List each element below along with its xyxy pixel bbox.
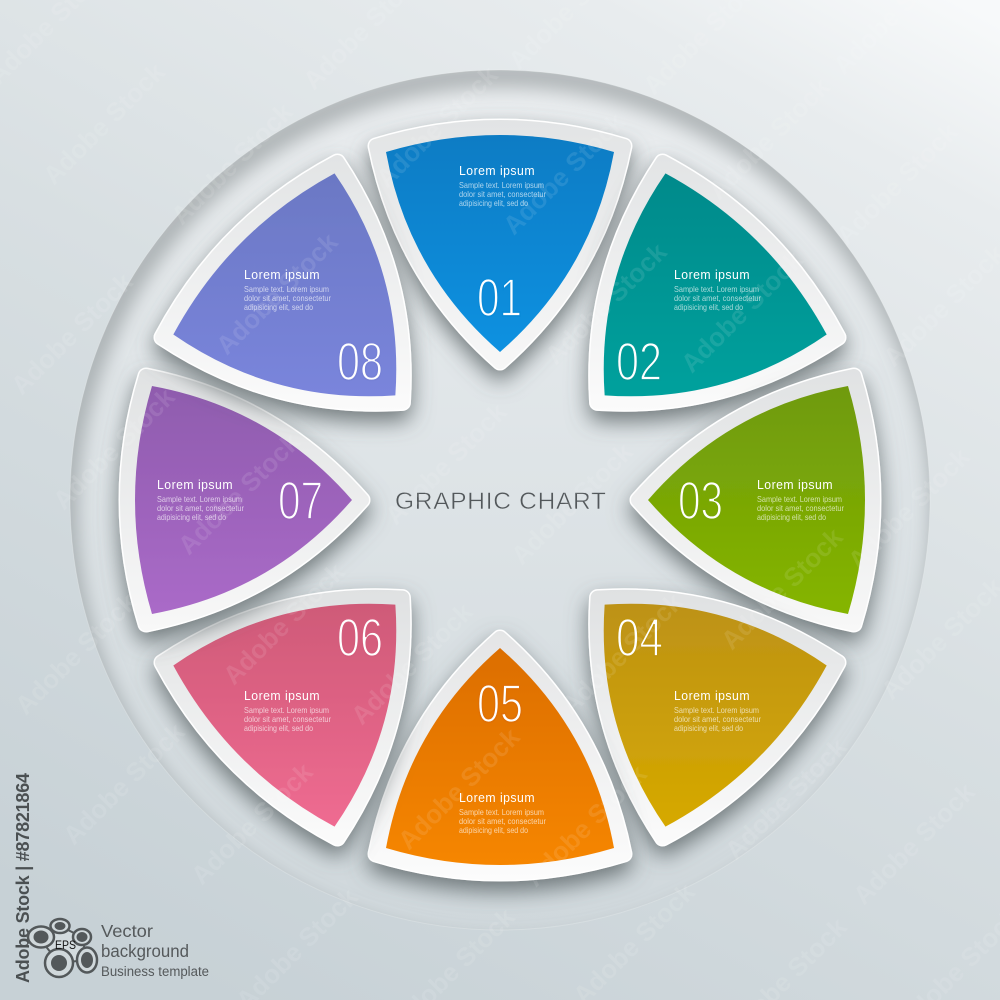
heading 04: Lorem ipsum [674,688,750,703]
body text 02: adipisicing elit, sed do [674,302,743,312]
body text 07: dolor sit amet, consectetur [157,503,244,513]
segment 05 [376,638,624,873]
watermarks: Adobe Stock [217,556,351,690]
heading 05: Lorem ipsum [459,790,535,805]
watermarks: Adobe Stock [47,381,181,515]
body text 03: Sample text. Lorem ipsum [757,494,842,504]
body text 06: Sample text. Lorem ipsum [244,705,329,715]
watermarks: Adobe Stock [370,59,504,193]
body text 07: adipisicing elit, sed do [157,512,226,522]
icon: EPS badge: EPS [55,938,76,952]
number 08: 08 [337,332,383,392]
body text 08: dolor sit amet, consectetur [244,293,331,303]
body text 02: Sample text. Lorem ipsum [674,284,759,294]
icon: EPS badge [28,919,97,977]
watermarks: Adobe Stock [210,226,344,360]
card 06 [149,510,490,851]
number 05: 05 [477,674,523,734]
watermarks: Adobe Stock [719,731,853,865]
heading 08: Lorem ipsum [244,267,320,282]
body text 01: adipisicing elit, sed do [459,198,528,208]
segment 06 [149,510,490,851]
segment 04 [510,510,851,851]
watermarks: Adobe Stock [702,71,836,205]
segment 03 [638,376,873,624]
watermarks: Adobe Stock [715,521,849,655]
watermarks: Adobe Stock [505,436,639,570]
body text 06: dolor sit amet, consectetur [244,714,331,724]
watermarks: Adobe Stock [675,244,809,378]
heading 03: Lorem ipsum [757,477,833,492]
watermarks: Adobe Stock [847,776,981,910]
watermarks: Adobe Stock [842,441,976,575]
card 02 [510,149,851,490]
segment 01 [376,127,624,362]
watermarks: Adobe Stock [519,758,653,892]
watermarks: Adobe Stock [392,721,526,855]
watermarks: Adobe Stock [379,396,513,530]
segment 08 [149,149,490,490]
watermarks: Adobe Stock [5,266,139,400]
body text 01 [459,180,546,208]
watermarks: Adobe Stock [57,716,191,850]
heading 01: Lorem ipsum [459,163,535,178]
caption [101,921,209,979]
body text 03: adipisicing elit, sed do [757,512,826,522]
body text 06: adipisicing elit, sed do [244,723,313,733]
watermarks: Adobe Stock [345,596,479,730]
body text 07 [157,494,244,522]
body text 05: Sample text. Lorem ipsum [459,807,544,817]
caption: background [101,941,189,961]
body text 04: Sample text. Lorem ipsum [674,705,759,715]
watermarks: Adobe Stock [185,756,319,890]
watermarks: Adobe Stock [497,106,631,240]
title: GRAPHIC CHART [395,488,606,515]
number 03: 03 [678,471,723,531]
watermarks: Adobe Stock [9,586,143,720]
card 04 [510,510,851,851]
watermarks: Adobe Stock [37,56,171,190]
body text 03 [757,494,844,522]
heading 02: Lorem ipsum [674,267,750,282]
watermarks: Adobe Stock [539,236,673,370]
number 02: 02 [616,332,662,392]
segment 07 [127,376,362,624]
number 04: 04 [616,608,663,668]
card 07 [127,376,362,624]
number 01: 01 [477,268,522,328]
recessed circle [64,70,944,954]
card 01 [376,127,624,362]
body text 07: Sample text. Lorem ipsum [157,494,242,504]
watermarks: Adobe Stock [555,586,689,720]
segment 02 [510,149,851,490]
number 07: 07 [278,471,323,531]
body text 04: dolor sit amet, consectetur [674,714,761,724]
watermarks: Adobe Stock [830,116,964,250]
number 06: 06 [337,608,383,668]
body text 08: adipisicing elit, sed do [244,302,313,312]
body text 01: dolor sit amet, consectetur [459,189,546,199]
stock id text: Adobe Stock | #87821864 [13,773,33,983]
card 08 [149,149,490,490]
body text 02: dolor sit amet, consectetur [674,293,761,303]
body text 03: dolor sit amet, consectetur [757,503,844,513]
body text 08: Sample text. Lorem ipsum [244,284,329,294]
body text 04: adipisicing elit, sed do [674,723,743,733]
body text 06 [244,705,331,733]
body text 02 [674,284,761,312]
caption: Vector [101,921,153,941]
caption: Business template [101,964,209,979]
watermarks: Adobe Stock [172,426,306,560]
body text 08 [244,284,331,312]
heading 06: Lorem ipsum [244,688,320,703]
body text 05 [459,807,546,835]
body text 04 [674,705,761,733]
watermarks: Adobe Stock [165,96,299,230]
body text 01: Sample text. Lorem ipsum [459,180,544,190]
body text 05: dolor sit amet, consectetur [459,816,546,826]
card 03 [638,376,873,624]
card 05 [376,638,624,873]
body text 05: adipisicing elit, sed do [459,825,528,835]
heading 07: Lorem ipsum [157,477,233,492]
